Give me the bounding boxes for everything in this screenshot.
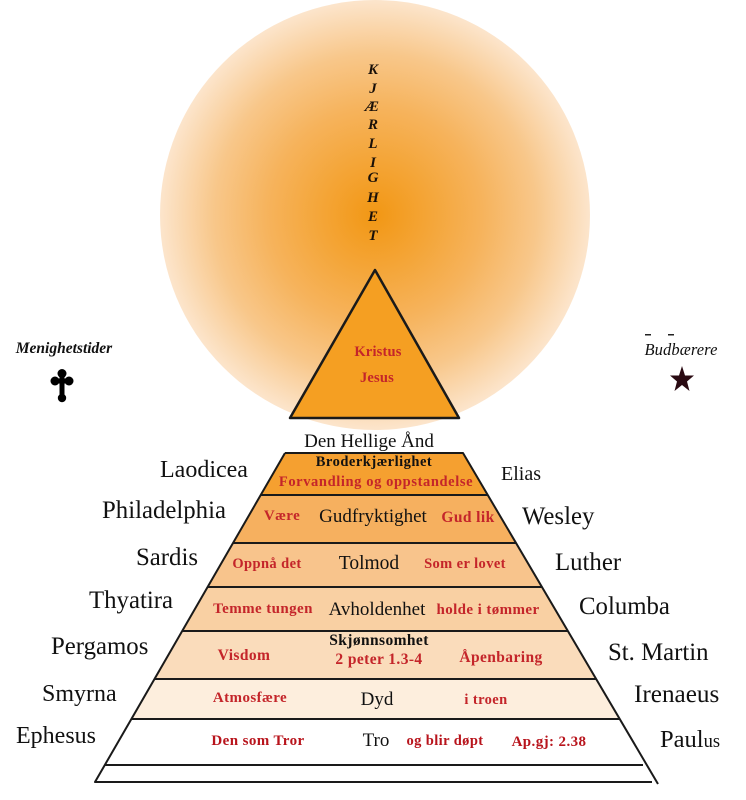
right legend: Budbaerere: Budbærere	[644, 340, 718, 359]
triangle: Kristus Jesus: Kristus	[354, 344, 402, 360]
church ages labels: Thyatira	[89, 587, 173, 614]
band 7: Tro: og blir døpt	[406, 733, 484, 749]
church ages labels: Philadelphia	[102, 497, 226, 524]
pyramid	[95, 453, 658, 784]
triangle: Kristus Jesus	[290, 270, 459, 418]
icon: star	[670, 366, 694, 391]
band 4: Avholdenhet: holde i tømmer	[436, 602, 540, 618]
church ages labels: Laodicea	[160, 457, 248, 483]
church ages labels: Sardis	[136, 544, 198, 571]
vertical word: Kjaerlighet: J	[368, 81, 377, 97]
band 4: Avholdenhet: Temme tungen	[213, 601, 313, 617]
band 6: Dyd: i troen	[464, 692, 508, 708]
messengers labels: St. Martin	[608, 639, 709, 666]
vertical word: Kjaerlighet: L	[367, 136, 378, 152]
band 5: Skjonnsomhet: Åpenbaring	[459, 649, 543, 666]
vertical word: Kjaerlighet: R	[367, 117, 378, 133]
band 7: Tro: Ap.gj: 2.38	[512, 734, 586, 750]
band 3: Tolmod: Tolmod	[339, 553, 399, 574]
band 3: Tolmod: Som er lovet	[424, 556, 506, 572]
band 5: Skjonnsomhet: 2 peter 1.3-4	[335, 651, 423, 668]
vertical word: Kjaerlighet: E	[367, 209, 378, 225]
band 1: Broderkjaerlighet: Forvandling og oppstandelse	[279, 474, 473, 490]
triangle: Kristus Jesus: Jesus	[360, 370, 394, 386]
church ages labels	[16, 457, 248, 749]
messengers labels: Columba	[579, 593, 670, 620]
band 2: Gudfryktighet: Gudfryktighet	[319, 506, 428, 527]
band 5: Skjonnsomhet: Visdom	[218, 647, 270, 664]
vertical word: Kjaerlighet: H	[366, 190, 380, 206]
vertical word: Kjaerlighet	[363, 62, 380, 244]
band 2: Gudfryktighet: Gud lik	[441, 509, 495, 526]
band 5: Skjonnsomhet: Skjønnsomhet	[329, 632, 429, 649]
band 5: Skjonnsomhet	[218, 632, 543, 668]
band 6: Dyd	[213, 689, 508, 710]
band 2: Gudfryktighet	[264, 506, 495, 527]
messengers labels: Paulus	[660, 726, 720, 753]
messengers labels: Elias	[501, 463, 541, 485]
messengers labels: Luther	[555, 549, 622, 576]
heading: Den Hellige And: Den Hellige Ånd	[304, 431, 434, 452]
band 6: Dyd: Dyd	[361, 689, 394, 710]
band 3: Tolmod	[232, 553, 506, 574]
vertical word: Kjaerlighet: I	[369, 155, 377, 171]
band 7: Tro: Tro	[363, 730, 389, 751]
band 3: Tolmod: Oppnå det	[232, 556, 302, 572]
church ages labels: Ephesus	[16, 723, 96, 749]
messengers labels	[501, 463, 720, 753]
left legend: Menighetstider	[15, 340, 113, 402]
band 4: Avholdenhet: Avholdenhet	[329, 599, 426, 620]
band 2: Gudfryktighet: Være	[264, 508, 300, 524]
vertical word: Kjaerlighet: Æ	[363, 99, 379, 115]
church ages labels: Pergamos	[51, 633, 148, 660]
right legend: Budbaerere	[644, 334, 718, 391]
icon: cross	[50, 369, 74, 402]
sun circle	[160, 0, 590, 430]
vertical word: Kjaerlighet: T	[368, 228, 378, 244]
left legend: Menighetstider: Menighetstider	[15, 340, 113, 357]
vertical word: Kjaerlighet: K	[367, 62, 379, 78]
vertical word: Kjaerlighet: G	[368, 170, 379, 186]
band 1: Broderkjaerlighet	[279, 454, 473, 490]
messengers labels: Wesley	[522, 503, 595, 530]
band 1: Broderkjaerlighet: Broderkjærlighet	[316, 454, 432, 470]
church ages labels: Smyrna	[42, 681, 117, 707]
band 7: Tro: Den som Tror	[211, 733, 305, 749]
band 6: Dyd: Atmosfære	[213, 690, 287, 706]
messengers labels: Irenaeus	[634, 681, 719, 708]
band 4: Avholdenhet	[213, 599, 540, 620]
band 7: Tro	[211, 730, 586, 751]
